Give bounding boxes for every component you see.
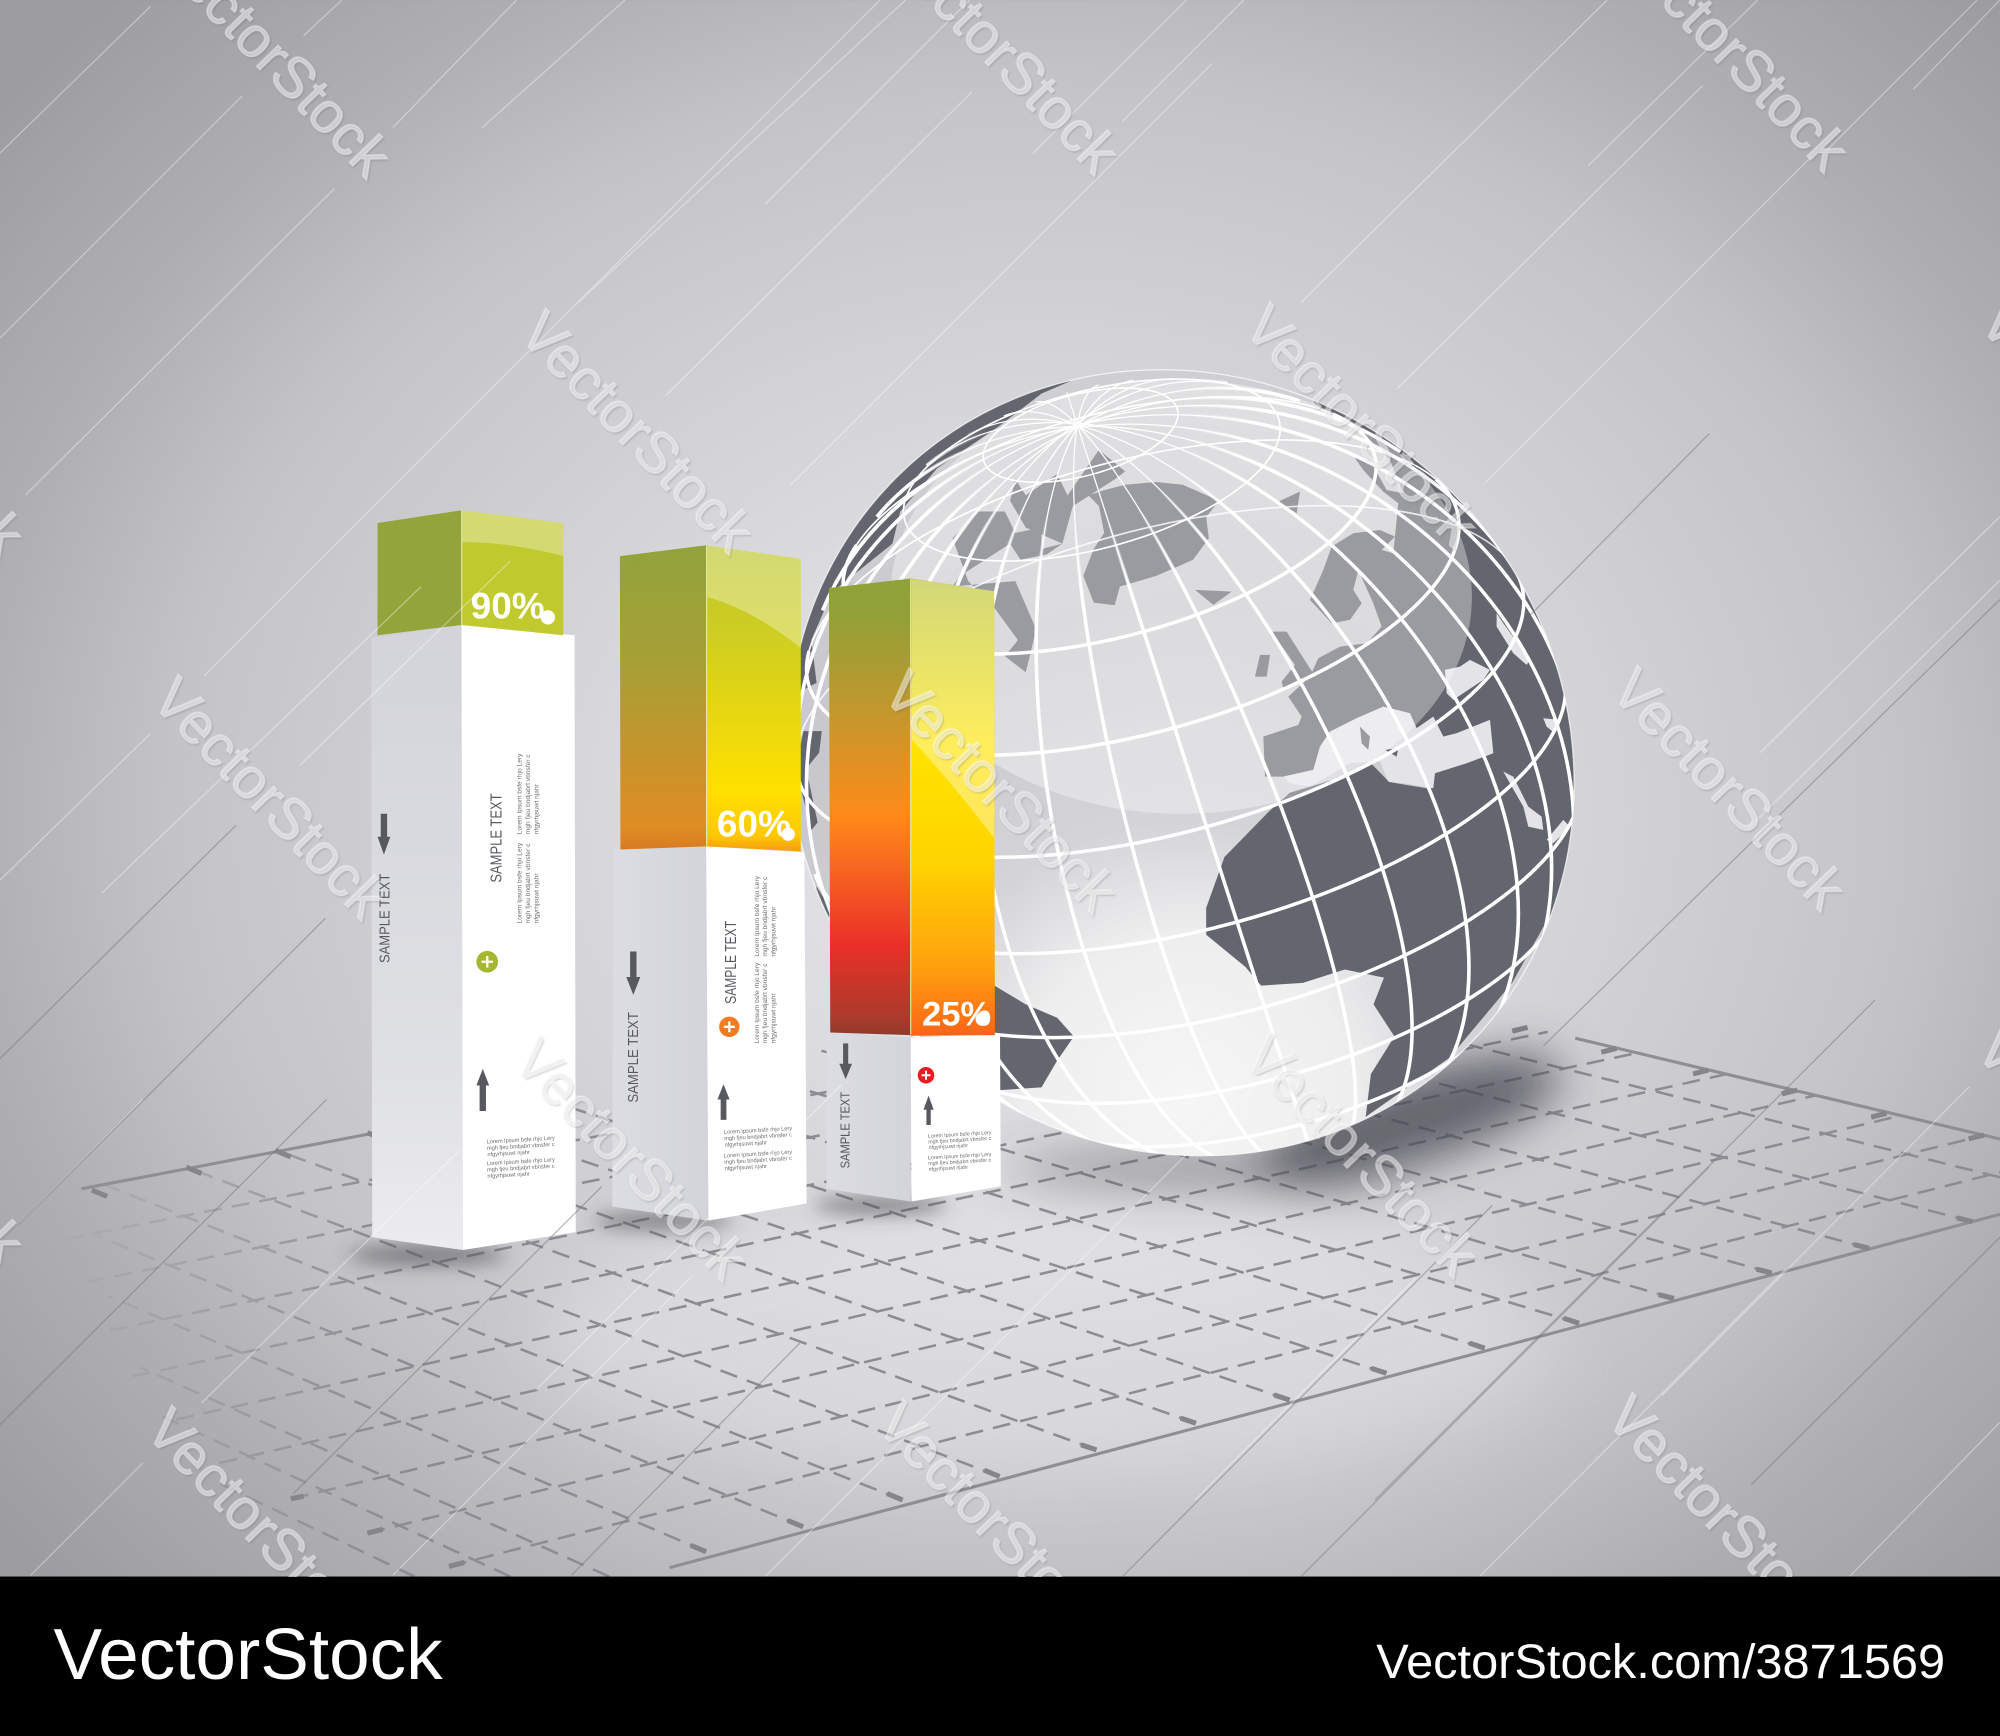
watermarks: VectorStock [1232,293,1491,558]
bar 1 horizontal body text: mgh fjeu bndjabrt vbnsfer c [487,1142,555,1152]
bar 1 rotated body text: mgh fjeu bndjabrt vbnsfer c [525,843,532,923]
bar 3 horizontal body text: nfgyrhjsuwt njahr [928,1143,968,1151]
bar 1 rotated body text: Lorem Ipsum bsfe rhjo Lery [517,843,524,923]
watermarks: VectorStock [1232,1023,1491,1288]
bar 3 colour right face [911,578,995,1036]
bar 2 horizontal body text: Lorem Ipsum bsfe rhjo Lery [724,1150,792,1160]
globe sphere [800,414,1484,1156]
watermarks: VectorStock [1599,657,1858,922]
footer bar [0,1577,2000,1736]
bar 3 down arrow [839,1043,852,1079]
bar 3: 25% [827,578,1001,1202]
bar 1 rotated body text: mgh fjeu bndjabrt vbnsfer c [525,754,532,834]
bar 1 plus badge [476,951,498,973]
bar 2 horizontal body text: mgh fjeu bndjabrt vbnsfer c [724,1132,792,1142]
bar 1 horizontal body text: mgh fjeu bndjabrt vbnsfer c [487,1164,555,1174]
bar 2 seam [706,546,708,846]
bar 2 colour right face [706,545,801,851]
bar 2 horizontal body text: nfgyrhjsuwt njahr [724,1164,767,1172]
bar 1 right label: SAMPLE TEXT [488,793,505,883]
bar 3 value: 25% [922,996,991,1034]
bar 3 horizontal body text: mgh fjeu bndjabrt vbnsfer c [928,1136,992,1145]
bar 2 left label: SAMPLE TEXT [626,1012,642,1103]
watermarks: VectorStock [1594,1384,1853,1649]
bar 3 horizontal body text [928,1130,993,1173]
bar 1 horizontal body text: Lorem Ipsum bsfe rhjo Lery [487,1136,555,1146]
bar 1 up arrow [476,1069,489,1111]
bar 2 rotated body text: mgh fjeu bndjabrt vbnsfer c [762,963,769,1043]
bar 2 rotated body text: nfgyrhjsuwt njahr [771,906,778,957]
bar 2 up arrow [717,1084,730,1120]
bar 2 colour left face [620,545,706,850]
bar 1 base left face [371,625,463,1250]
bar 2 value: 60% [717,804,791,845]
watermarks: VectorStock [134,1397,393,1662]
bar 3 horizontal body text: Lorem Ipsum bsfe rhjo Lery [928,1152,992,1161]
bar 3 base right face [911,1034,1001,1202]
continents [800,380,1574,1117]
bar 2 horizontal body text: Lorem Ipsum bsfe rhjo Lery [724,1126,792,1136]
bar 1 rotated body text: nfgyrhjsuwt njahr [533,873,540,923]
bar 3 up arrow [923,1096,934,1125]
bar 2 rotated body text: Lorem Ipsum bsfe rhjo Lery [754,876,761,957]
bar 2 rotated body text: mgh fjeu bndjabrt vbnsfer c [762,876,769,957]
bar 2 base left face [612,846,708,1221]
globe [800,369,1575,1156]
shadow: globe [1008,1027,1575,1213]
globe rim [626,207,1737,1318]
bar 1 left label: SAMPLE TEXT [378,874,394,963]
bar 2: 60% [612,545,807,1221]
bar 1 gloss [462,510,563,556]
watermarks: VectorStock [871,659,1130,924]
footer url: VectorStock.com/3871569 [1376,1635,1945,1689]
bar 3 horizontal body text: Lorem Ipsum bsfe rhjo Lery [928,1130,992,1140]
bar 2 plus badge [719,1017,740,1037]
watermarks: VectorStock [140,666,399,931]
bar 2 rotated body text: nfgyrhjsuwt njahr [771,993,778,1043]
bar 3 base left face [827,1033,911,1202]
bar 3 plus badge [918,1067,934,1084]
bar 2 base right face [706,846,807,1221]
bar 1 colour right face [461,510,563,635]
bar 1 value: 90% [471,586,545,627]
floor glow [536,1199,1556,1480]
shadows: bars [348,1196,946,1265]
bar 2 horizontal body text: mgh fjeu bndjabrt vbnsfer c [724,1156,792,1166]
bar 2 horizontal body text [724,1126,793,1172]
bar 3 gloss [912,579,994,838]
seas [1283,613,1570,843]
bar 1 horizontal body text: nfgyrhjsuwt njahr [487,1171,530,1180]
bar 1 horizontal body text: nfgyrhjsuwt njahr [487,1150,530,1158]
floor grid [66,979,2000,1577]
bar 1 down arrow [378,814,390,855]
bar 1 rotated body text: Lorem Ipsum bsfe rhjo Lery [517,754,524,834]
bar 3 horizontal body text: mgh fjeu bndjabrt vbnsfer c [928,1158,992,1167]
bar 2 right label: SAMPLE TEXT [723,921,740,1004]
footer logo: VectorStock [54,1615,444,1695]
bar 3 left label: SAMPLE TEXT [837,1092,852,1168]
graticule: heavier meridians away from the pole [800,379,1574,1155]
bar 3 horizontal body text: nfgyrhjsuwt njahr [928,1165,968,1173]
bar 2 gloss [707,545,801,648]
watermarks: VectorStock [865,1390,1123,1655]
graticule [800,378,1574,1148]
bar 1 horizontal body text: Lorem Ipsum bsfe rhjo Lery [487,1157,555,1167]
bar 1: 90% [371,510,576,1250]
bar 1 rotated body text [517,753,540,923]
globe gloss [890,380,1472,814]
bar 1 base right face [461,625,576,1250]
bar 3 seam [910,579,912,1034]
bar 2 rotated body text: Lorem Ipsum bsfe rhjo Lery [754,963,761,1043]
bar 2 down arrow [626,952,640,995]
bar 1 rotated body text: nfgyrhjsuwt njahr [533,783,540,834]
bar 1 colour left face [378,510,461,635]
bar 1 horizontal body text [487,1136,556,1180]
watermarks: VectorStock [501,1027,760,1292]
bar 2 rotated body text [754,875,778,1043]
bar 2 horizontal body text: nfgyrhjsuwt njahr [724,1140,767,1149]
watermarks: VectorStock [507,300,766,565]
bar 3 colour left face [829,578,911,1035]
bar 1 seam [461,510,463,625]
